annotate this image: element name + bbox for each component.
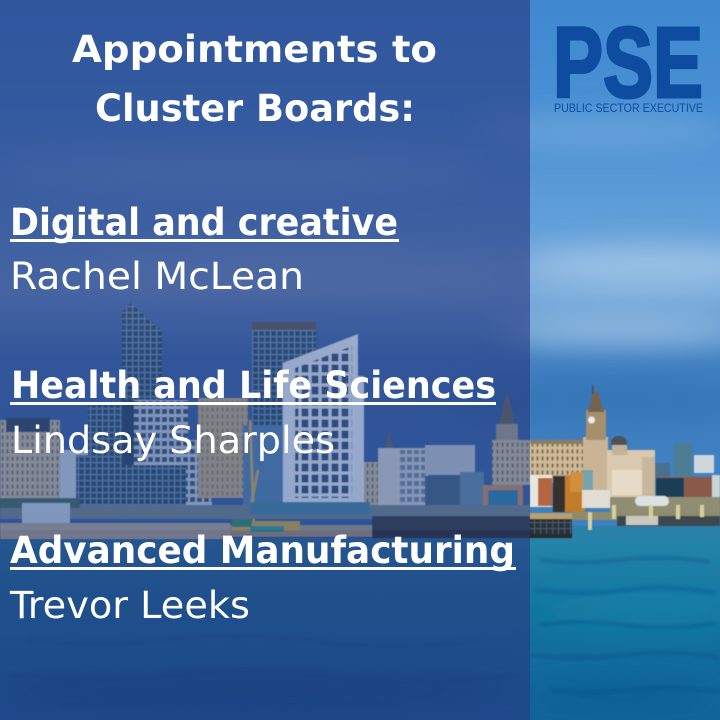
- appointment: health and life sciences: Health and Life Sciences: [11, 364, 496, 407]
- water ripples: [10, 558, 720, 708]
- title: Appointments to: [72, 28, 437, 71]
- title: [72, 28, 437, 130]
- title: Cluster Boards:: [95, 87, 415, 130]
- clouds: [0, 116, 720, 348]
- appointment: health and life sciences: Lindsay Sharples: [11, 419, 335, 462]
- appointment: digital and creative: [10, 201, 399, 298]
- appointment: advanced manufacturing: Trevor Leeks: [9, 584, 250, 627]
- blue translucent text panel: [0, 0, 530, 720]
- appointment: digital and creative: Digital and creative: [10, 201, 398, 244]
- appointment: digital and creative: Rachel McLean: [10, 255, 304, 298]
- appointment: advanced manufacturing: [9, 529, 516, 627]
- water: [0, 538, 720, 720]
- dark cloud band: [440, 370, 720, 430]
- logo: PSE: PUBLIC SECTOR EXECUTIVE: [554, 101, 703, 115]
- skyline seen on the right, untinted: [530, 384, 720, 539]
- sky: [0, 0, 720, 530]
- appointment: advanced manufacturing: Advanced Manufacturing: [10, 529, 515, 572]
- skyline seen through the panel: [0, 303, 530, 540]
- appointment: health and life sciences: [10, 364, 496, 462]
